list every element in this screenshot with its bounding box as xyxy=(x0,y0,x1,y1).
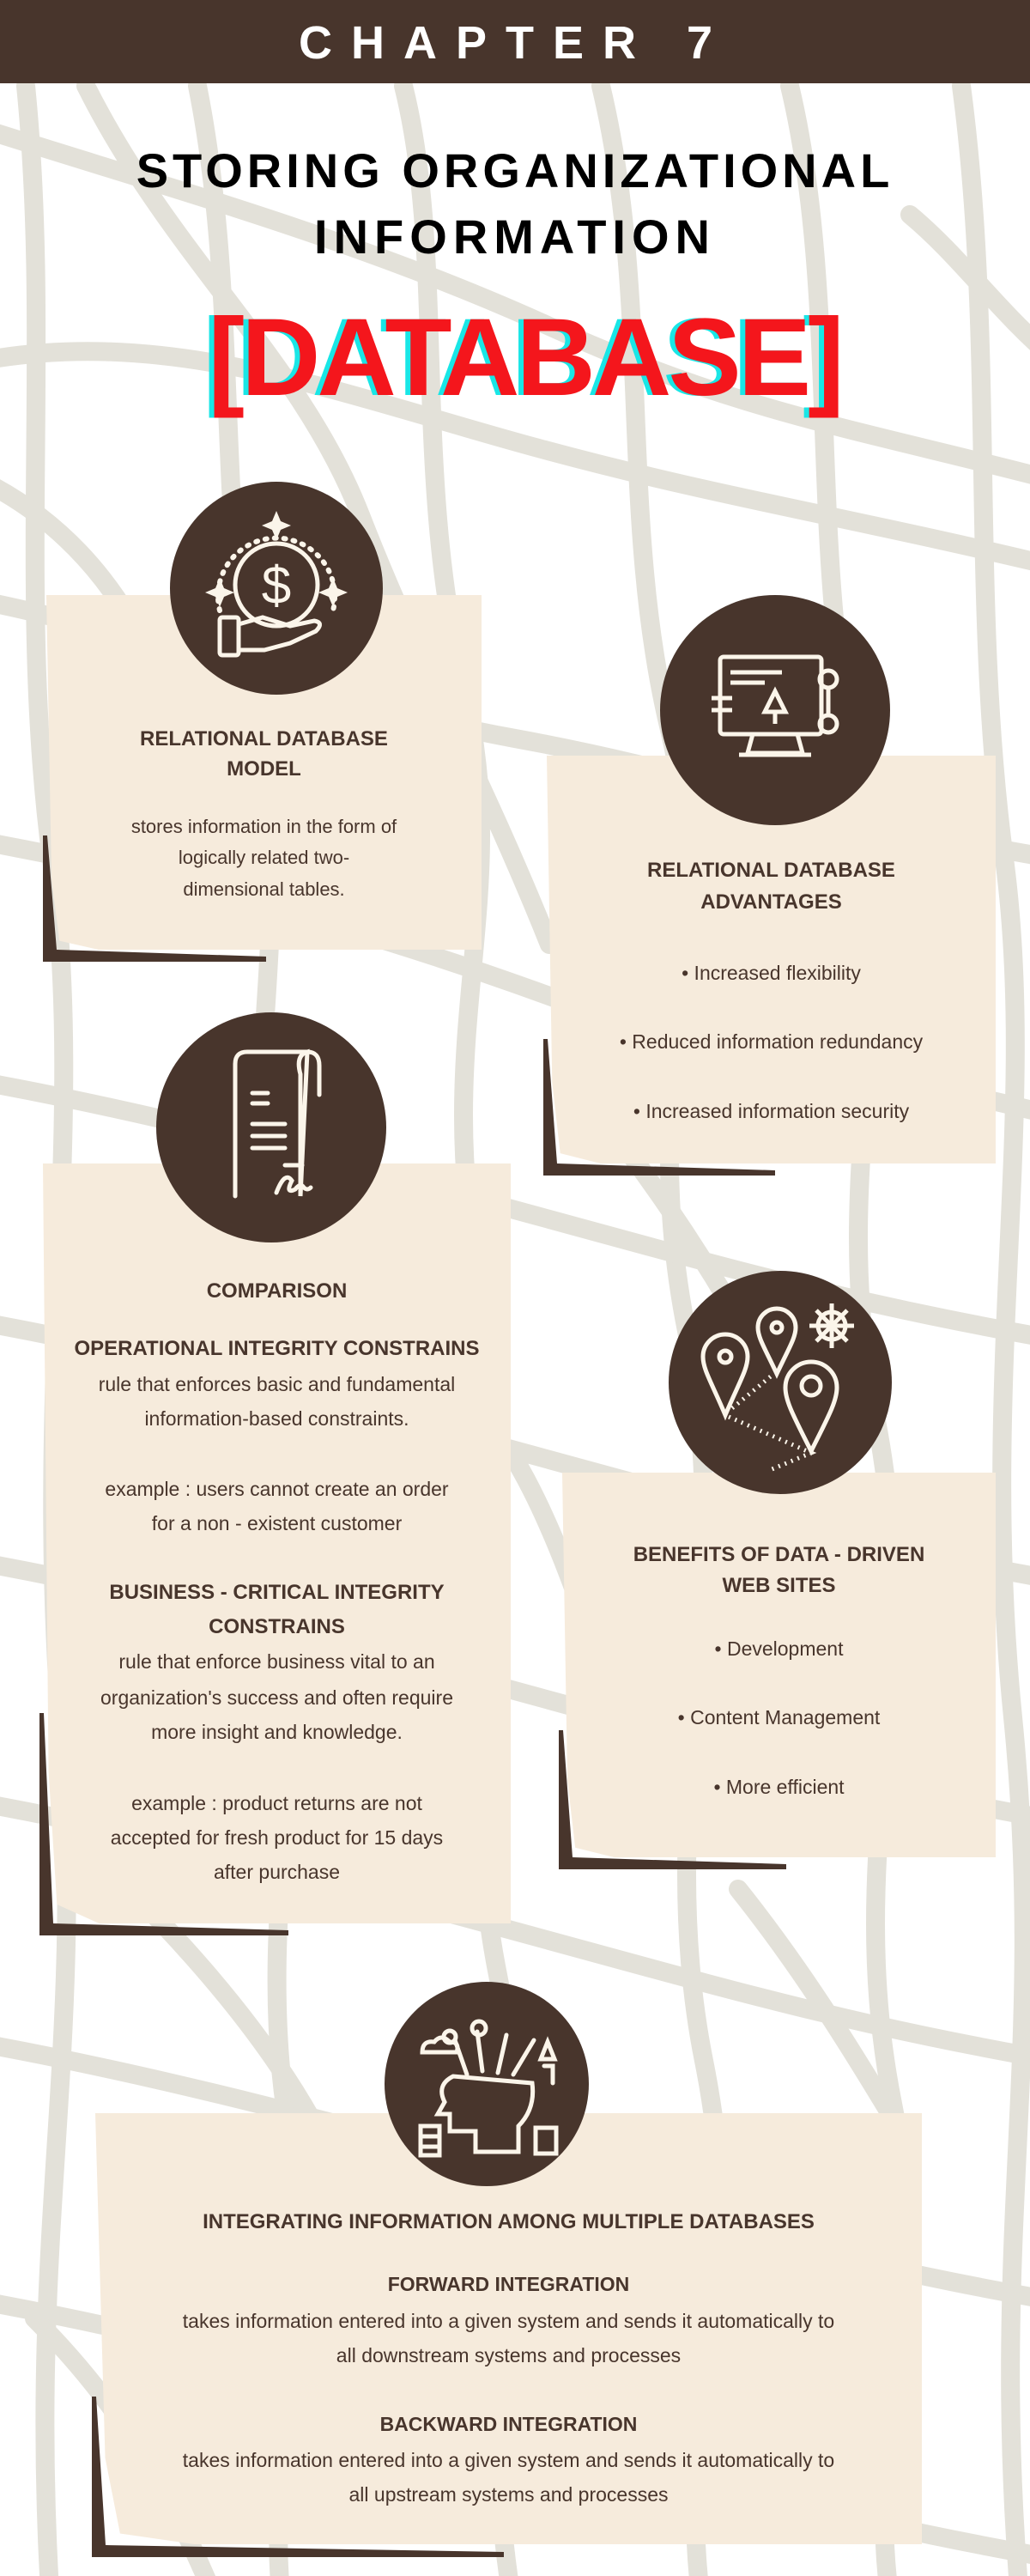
heading: RELATIONAL DATABASE xyxy=(140,727,388,750)
title: [DATABASE] xyxy=(203,296,836,419)
heading: BENEFITS OF DATA - DRIVEN xyxy=(633,1543,924,1566)
header bar xyxy=(0,0,1030,83)
panel: benefits of data-driven web sites: • Content Management xyxy=(678,1706,880,1728)
panel: comparison: for a non - existent customer xyxy=(152,1512,402,1534)
panel: integrating information among multiple databases: all upstream systems and processes xyxy=(348,2483,668,2506)
panel: relational database model: dimensional tables. xyxy=(183,878,345,900)
panel: relational database model: MODEL xyxy=(227,757,301,781)
heading: COMPARISON xyxy=(207,1279,347,1303)
chapter label: CHAPTER 7 xyxy=(299,17,731,69)
panel: comparison: information-based constraints. xyxy=(144,1407,409,1430)
panel: integrating information among multiple databases: all downstream systems and processes xyxy=(336,2344,681,2366)
title: STORING ORGANIZATIONAL xyxy=(136,143,894,197)
panel: comparison: rule that enforce business vital to an xyxy=(118,1650,435,1673)
panel: comparison: accepted for fresh product for 15 days xyxy=(111,1826,443,1849)
icon: monitor xyxy=(660,595,890,825)
heading: RELATIONAL DATABASE xyxy=(647,859,895,882)
title: INFORMATION xyxy=(314,210,716,264)
panel: comparison xyxy=(39,1163,511,1935)
heading: INTEGRATING INFORMATION AMONG MULTIPLE DATABASES xyxy=(203,2210,815,2233)
forward integration: FORWARD INTEGRATION xyxy=(388,2273,629,2295)
icon: hand with coin: $ xyxy=(262,556,291,616)
panel: comparison: more insight and knowledge. xyxy=(151,1721,403,1743)
panel: relational database model: logically related two- xyxy=(179,847,349,868)
panel: relational database model xyxy=(43,595,482,962)
panel: comparison: example : product returns are not xyxy=(131,1792,422,1814)
panel: benefits of data-driven web sites: WEB SITES xyxy=(722,1574,836,1597)
business-critical integrity: BUSINESS - CRITICAL INTEGRITY xyxy=(109,1581,445,1604)
panel: benefits of data-driven web sites xyxy=(559,1473,996,1869)
panel: comparison: example : users cannot create an order xyxy=(105,1478,449,1500)
icon: head with ideas xyxy=(385,1982,589,2186)
icon: map pins xyxy=(669,1271,892,1494)
icon: hand with coin xyxy=(170,482,383,695)
panel: comparison: CONSTRAINS xyxy=(209,1615,345,1638)
panel: comparison: organization's success and often require xyxy=(100,1686,453,1709)
panel: relational database advantages: • Increased information security xyxy=(633,1100,909,1122)
operational integrity: OPERATIONAL INTEGRITY CONSTRAINS xyxy=(74,1337,480,1360)
panel: relational database advantages: ADVANTAGES xyxy=(700,890,842,914)
panel: relational database advantages: • Reduced information redundancy xyxy=(620,1030,923,1053)
icon: signed document xyxy=(156,1012,386,1242)
panel: integrating information among multiple databases: takes information entered into a given system and sends it automatically to xyxy=(183,2449,834,2471)
panel: integrating information among multiple databases xyxy=(92,2113,922,2557)
backward integration: BACKWARD INTEGRATION xyxy=(380,2413,637,2435)
panel: comparison: rule that enforces basic and fundamental xyxy=(99,1373,455,1395)
panel: relational database advantages xyxy=(543,756,996,1176)
bullet list: • Development xyxy=(715,1637,843,1660)
description: stores information in the form of xyxy=(131,816,397,837)
bullet list: • Increased flexibility xyxy=(682,962,861,984)
title xyxy=(136,143,894,419)
panel: benefits of data-driven web sites: • More efficient xyxy=(713,1776,845,1798)
panel: comparison: after purchase xyxy=(214,1861,340,1883)
title: [DATABASE] xyxy=(208,296,841,419)
panel: integrating information among multiple databases: takes information entered into a given system and sends it automatically to xyxy=(183,2310,834,2332)
